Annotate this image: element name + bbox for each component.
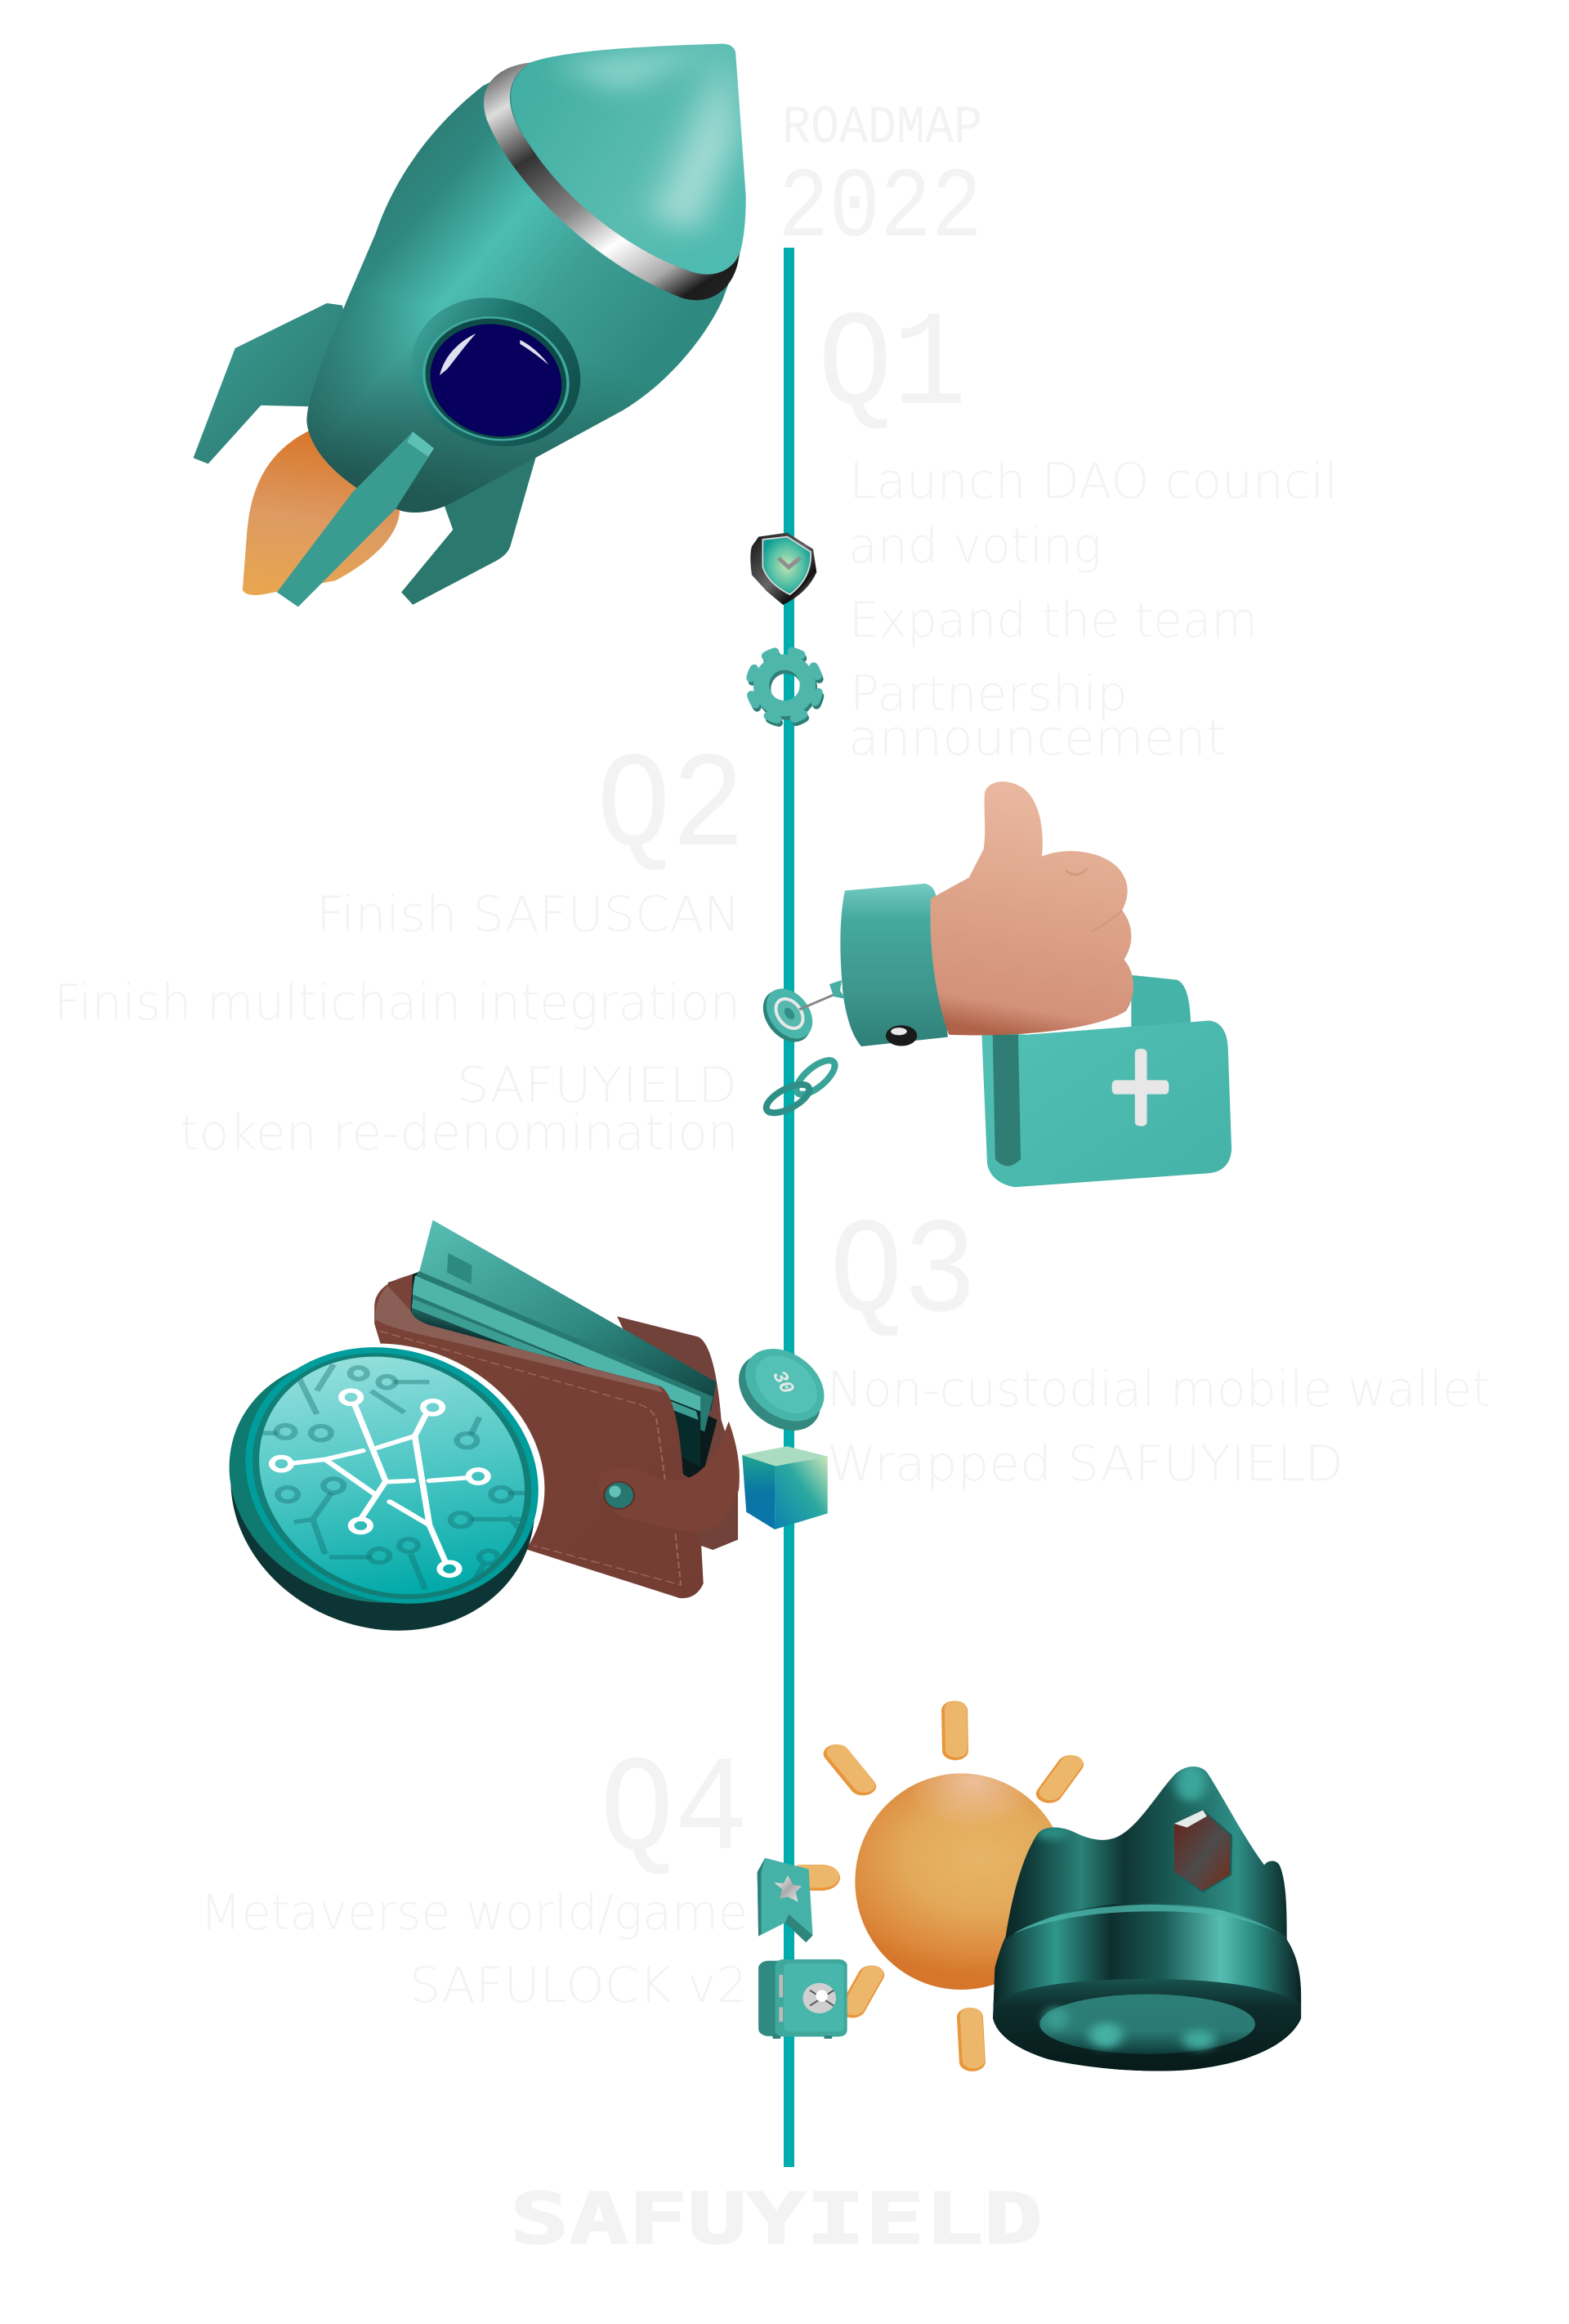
icon: thumbs up with folder [840,781,1232,1187]
heading: ROADMAP 2022 [778,97,982,266]
panel: Q1 milestones: Q1 [818,290,967,444]
teal cards [411,1220,717,1466]
wallet back panel [617,1316,738,1550]
rocket right fin [401,453,537,605]
coin edge [198,1340,567,1649]
rocket silver band [484,63,740,300]
hand [930,781,1133,1035]
icon: gear [744,644,827,730]
panel: Q3 milestones: Non-custodial mobile wallet [827,1361,1491,1418]
panel: Q1 milestones: announcement [848,710,1226,767]
sun rays [802,1710,1071,2062]
folder back tab [1131,975,1191,1028]
crown inner opening [1039,1995,1255,2054]
sun ray highlights [804,1708,1072,2061]
heading: ROADMAP 2022: 2022 [778,152,982,266]
panel: Q1 milestones: Partnership [850,665,1128,723]
panel: Q4 milestones: Q4 [600,1735,749,1889]
panel: Q3 milestones: Wrapped SAFUYIELD [827,1435,1343,1493]
icon: crown [989,1762,1306,2077]
panel: Q2 milestones: token re-denomination [180,1104,739,1162]
panel: Q2 milestones: Finish multichain integration [54,974,740,1032]
icon: rocket [193,43,746,607]
icon: 30 coin [722,1340,839,1440]
wallet stitching [379,1331,681,1585]
icon: 30 coin: 30 [766,1369,798,1395]
cuff [840,884,948,1046]
rocket front fin [277,432,434,607]
panel: Q2 milestones: Q2 [597,732,745,885]
folder front [981,1021,1232,1187]
rocket flame [243,430,400,595]
crown shading [989,1762,1306,2077]
panel: Q1 milestones: Launch DAO council [849,453,1338,510]
icon: wallet [374,1220,740,1598]
white circuit network [272,1390,488,1575]
panel: Q4 milestones: Metaverse world/game [200,1884,748,1941]
wallet front [374,1274,704,1598]
panel: Q1 milestones: and voting [848,517,1102,575]
rocket porthole [391,284,601,459]
timeline line [784,248,794,2167]
coin rim [208,1326,575,1625]
icon: sun [802,1708,1072,2062]
icon: target with dart [753,979,846,1051]
wallet dark interior [387,1271,717,1484]
footer logo wordmark: SAFUYIELD: SAFUYIELD [510,2178,1043,2260]
icon: bookmark with star [758,1858,813,1942]
coin white outline [207,1321,583,1627]
panel: Q1 milestones [818,290,1338,767]
crown lower ring [989,1979,1306,2077]
icon: safe [758,1959,847,2039]
icon: chain links [762,1055,840,1118]
panel: Q2 milestones [54,732,745,1162]
crown band [989,1903,1306,2010]
panel: Q4 milestones: SAFULOCK v2 [409,1957,748,2014]
icon: circuit coin [229,1344,544,1631]
panel: Q3 milestones: Q3 [829,1198,977,1351]
faded circuit traces [258,1364,525,1589]
panel: Q2 milestones: SAFUYIELD [457,1057,737,1114]
panel: Q3 milestones [827,1198,1491,1493]
wallet snap button [604,1482,634,1509]
icon: gradient cube [742,1446,828,1529]
panel: Q1 milestones: Expand the team [849,592,1258,649]
rocket body [306,63,740,513]
panel: Q4 milestones [200,1735,749,2014]
panel: Q2 milestones: Finish SAFUSCAN [316,886,740,943]
rocket back fin [193,303,352,463]
icon: shield [750,533,816,605]
crown gem [1173,1810,1232,1892]
sun disc [855,1774,1067,1990]
wallet strap [598,1422,740,1531]
coin face [225,1337,559,1614]
rocket nose cone [511,43,746,275]
heading: ROADMAP 2022: ROADMAP [782,97,982,159]
wallet worn lip [375,1286,663,1392]
